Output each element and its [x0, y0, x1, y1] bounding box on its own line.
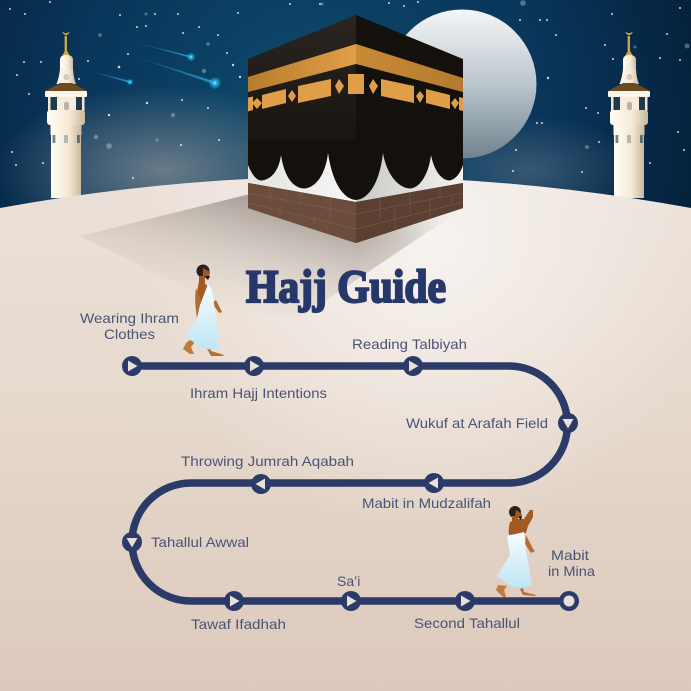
label: mabit in mina: in Mina [548, 563, 595, 579]
stars [9, 1, 685, 179]
label: mabit in mudzalifah: Mabit in Mudzalifah [362, 495, 491, 511]
hazy stars [94, 0, 689, 149]
night sky background [0, 0, 691, 215]
kaaba [248, 15, 463, 243]
right face [356, 15, 463, 243]
label: tawaf ifadhah: Tawaf Ifadhah [191, 616, 286, 632]
pilgrim praying [496, 506, 536, 597]
label: wearing ihram clothes [80, 310, 179, 342]
label: wukuf at arafah field: Wukuf at Arafah Field [406, 415, 548, 431]
ground [0, 176, 691, 691]
pilgrim walking [183, 264, 224, 356]
route path [132, 366, 569, 601]
moon [388, 10, 536, 158]
shooting stars [82, 41, 222, 90]
stone base [248, 183, 356, 243]
label: throwing jumrah aqabah: Throwing Jumrah Aqabah [181, 453, 354, 469]
right minaret [608, 32, 650, 198]
step labels [80, 310, 595, 632]
label: wearing ihram clothes: Clothes [104, 326, 155, 342]
title: Hajj Guide [246, 261, 446, 313]
gold belt [248, 44, 356, 92]
label: wearing ihram clothes: Wearing Ihram [80, 310, 179, 326]
label: reading talbiyah: Reading Talbiyah [352, 336, 467, 352]
left face [248, 15, 356, 243]
route nodes [122, 356, 579, 611]
label: mabit in mina: Mabit [551, 547, 589, 563]
kaaba shadow [80, 190, 463, 318]
left minaret [45, 32, 87, 198]
label: tahallul awwal: Tahallul Awwal [151, 534, 249, 550]
label: mabit in mina [548, 547, 595, 579]
label: second tahallul: Second Tahallul [414, 615, 520, 631]
gold panels [248, 74, 463, 112]
white cloth [248, 150, 356, 202]
black curtain scallops [248, 140, 463, 200]
label: ihram hajj intentions: Ihram Hajj Intentions [190, 385, 327, 401]
label: sa'i: Sa’i [337, 573, 360, 589]
